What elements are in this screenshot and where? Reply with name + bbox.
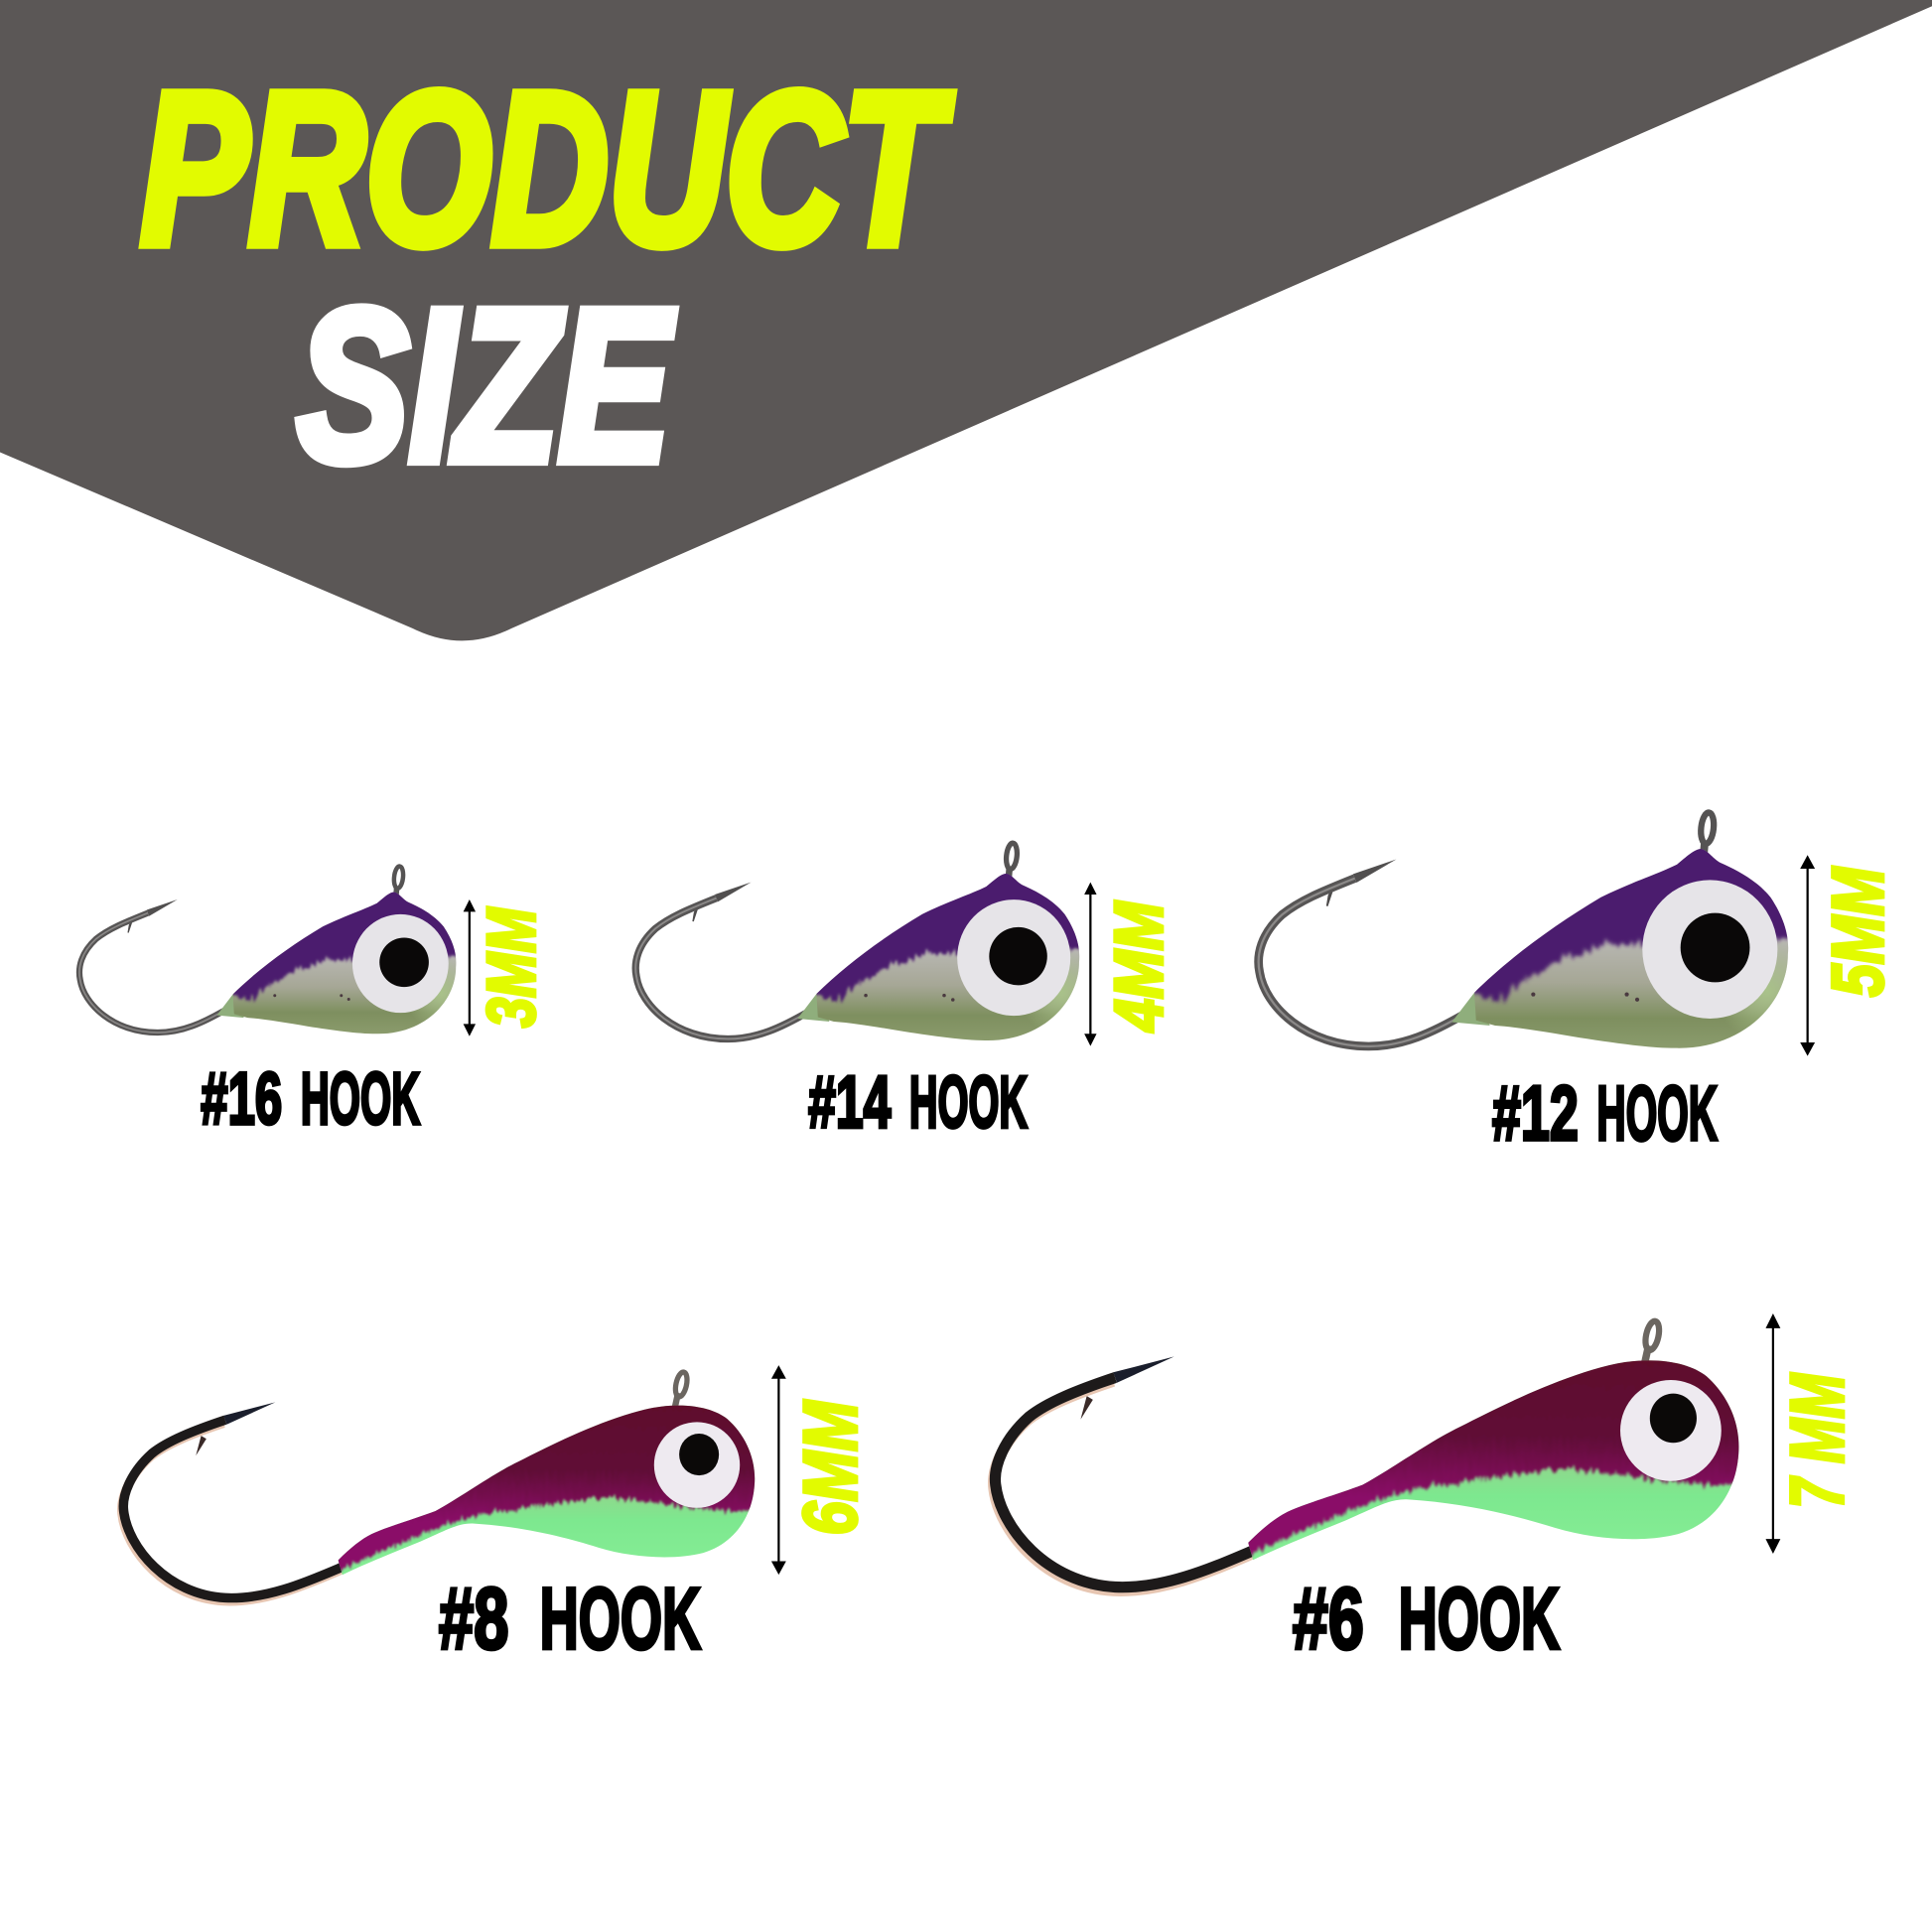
hook label: #8: HOOK (540, 1570, 701, 1668)
hook label: #6: #6 (1293, 1570, 1364, 1668)
hook label: #14 (808, 1061, 1028, 1144)
hook label: #6 (1293, 1570, 1560, 1668)
hook label: #16: #16 (201, 1057, 282, 1140)
hook label: #16 (201, 1057, 420, 1140)
header banner (0, 0, 1932, 640)
hook label: #8: #8 (439, 1570, 509, 1668)
arrow: 4mm (1084, 883, 1097, 1046)
jig: #8 hook (122, 1371, 769, 1601)
size label: 3MM: 3MM (475, 906, 550, 1028)
title: SIZE: SIZE (297, 265, 675, 507)
hook label: #12: HOOK (1596, 1069, 1718, 1157)
arrow: 7mm (1765, 1313, 1780, 1554)
hook label: #8 (439, 1570, 701, 1668)
size label: 6MM: 6MM (789, 1400, 874, 1535)
jig: #14 hook (635, 843, 1094, 1049)
title: PRODUCT: PRODUCT (140, 48, 953, 290)
arrow: 3mm (464, 899, 476, 1036)
jig: #12 hook (1259, 812, 1805, 1058)
hook label: #12 (1492, 1069, 1718, 1157)
hook label: #16: HOOK (301, 1057, 420, 1140)
size label: 4MM: 4MM (1101, 900, 1176, 1033)
jig: #16 hook (79, 866, 469, 1041)
hook label: #14: HOOK (909, 1061, 1028, 1144)
size label: 7 MM: 7 MM (1776, 1372, 1861, 1508)
size label: 5MM: 5MM (1817, 866, 1898, 997)
arrow: 5mm (1800, 855, 1815, 1056)
hook label: #6: HOOK (1399, 1570, 1560, 1668)
arrow: 6mm (771, 1365, 786, 1575)
hook label: #12: #12 (1492, 1069, 1579, 1157)
hook label: #14: #14 (808, 1061, 891, 1144)
jig: #6 hook (994, 1319, 1756, 1590)
